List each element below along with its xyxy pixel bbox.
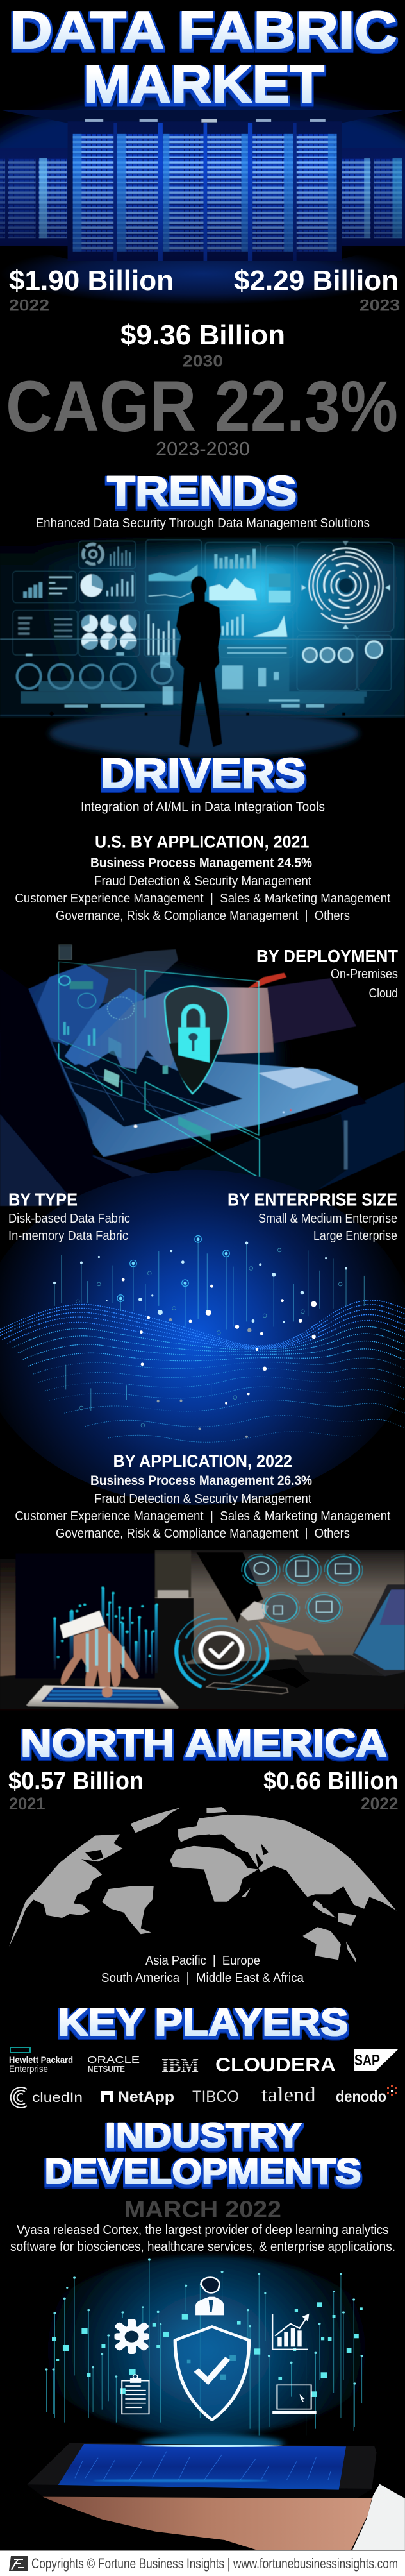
logo: Oracle NetSuite: ORACLE bbox=[87, 2055, 140, 2065]
image: hand holding tablet with holographic security icons bbox=[27, 2256, 405, 2550]
logo: Denodo: denodo bbox=[336, 2088, 386, 2106]
shirt cuff bbox=[352, 2484, 405, 2550]
segment: Fraud Detection & Security Management bbox=[94, 1492, 311, 1506]
date: MARCH 2022 bbox=[124, 2196, 281, 2223]
value: $2.29 Billion bbox=[234, 265, 399, 296]
logo: Hewlett Packard Enterprise: Hewlett Packard bbox=[9, 2055, 73, 2065]
year: 2023 bbox=[360, 296, 400, 314]
hand bbox=[42, 2497, 372, 2550]
line 1: INDUSTRY bbox=[105, 2116, 302, 2155]
block: by application 2022 bbox=[15, 1452, 391, 1541]
businessman silhouette bbox=[176, 576, 222, 748]
heading: drivers: DRIVERS bbox=[101, 749, 306, 797]
segment: In-memory Data Fabric bbox=[8, 1229, 128, 1243]
logo: TIBCO: TIBCO bbox=[192, 2088, 239, 2106]
logo: SAP bbox=[354, 2049, 398, 2071]
logo: Hewlett Packard Enterprise bbox=[9, 2047, 73, 2074]
line 2: DEVELOPMENTS bbox=[45, 2151, 361, 2191]
segments: Customer Experience Management | Sales & Marketing Management bbox=[15, 1509, 391, 1523]
stat: 2023 market size bbox=[234, 265, 400, 314]
value: $0.57 Billion bbox=[8, 1768, 144, 1795]
title line 1: DATA FABRIC bbox=[10, 0, 397, 60]
footer background bbox=[0, 2551, 405, 2576]
image: server racks bbox=[0, 94, 405, 305]
logo: Cloudera: CLOUDERA bbox=[215, 2055, 336, 2076]
year: 2021 bbox=[9, 1794, 45, 1813]
heading: trends: TRENDS bbox=[107, 467, 297, 514]
stat: North America 2022 bbox=[263, 1768, 399, 1813]
footer bbox=[0, 2550, 405, 2576]
segment: On-Premises bbox=[331, 967, 398, 981]
drivers text: Integration of AI/ML in Data Integration Tools bbox=[81, 801, 325, 815]
year: 2022 bbox=[9, 296, 49, 314]
logo: Oracle NetSuite: NETSUITE bbox=[88, 2064, 125, 2074]
icon: shield with check bbox=[175, 2326, 249, 2420]
heading: U.S. BY APPLICATION, 2021 bbox=[95, 833, 309, 852]
logo: Hewlett Packard Enterprise: Enterprise bbox=[9, 2063, 48, 2074]
segments: Customer Experience Management | Sales & Marketing Management bbox=[15, 892, 391, 906]
leading segment: Business Process Management 26.3% bbox=[90, 1473, 312, 1488]
icon: growth chart bbox=[272, 2314, 309, 2350]
image: business hands with tablet and check mark bbox=[0, 1539, 405, 1725]
logo: SAP: SAP bbox=[354, 2052, 380, 2069]
value: $0.66 Billion bbox=[263, 1768, 399, 1795]
logo: Oracle NetSuite bbox=[87, 2055, 140, 2074]
trends text: Enhanced Data Security Through Data Management Solutions bbox=[36, 516, 370, 530]
stat: 2030 market size bbox=[120, 319, 285, 371]
title bbox=[10, 0, 397, 114]
CAGR period: 2023-2030 bbox=[156, 437, 250, 460]
regions line 2: South America | Middle East & Africa bbox=[101, 1971, 304, 1985]
leading segment: Business Process Management 24.5% bbox=[90, 856, 312, 870]
image: data wave with glowing particles bbox=[0, 1170, 405, 1505]
icon: laptop bbox=[272, 2385, 317, 2414]
map: world globe bbox=[9, 1807, 397, 1962]
image: businessman viewing data dashboard bbox=[0, 534, 405, 757]
value: $1.90 Billion bbox=[9, 265, 174, 296]
logo: NetApp: NetApp bbox=[118, 2089, 174, 2106]
block: U.S. by application 2021 bbox=[15, 833, 391, 923]
block: by deployment bbox=[256, 946, 398, 1001]
stat: North America 2021 bbox=[8, 1768, 144, 1813]
heading: industry developments bbox=[45, 2116, 361, 2191]
region list bbox=[101, 1954, 304, 1985]
icon: person bbox=[195, 2277, 224, 2315]
year: 2022 bbox=[361, 1794, 399, 1813]
logos: key players bbox=[9, 2047, 398, 2108]
logo: Fortune Business Insights bbox=[9, 2556, 28, 2571]
segments: Governance, Risk & Compliance Management | Others bbox=[56, 1527, 350, 1541]
block: by enterprise size bbox=[227, 1189, 397, 1243]
logo: Talend: talend bbox=[261, 2083, 315, 2106]
development text bbox=[10, 2223, 395, 2254]
line 1: Vyasa released Cortex, the largest provider of deep learning analytics bbox=[17, 2223, 388, 2237]
heading: BY TYPE bbox=[8, 1189, 78, 1210]
heading: key players: KEY PLAYERS bbox=[58, 2001, 349, 2044]
tablet bbox=[27, 2443, 377, 2498]
segment: Cloud bbox=[369, 987, 398, 1001]
segment: Disk-based Data Fabric bbox=[8, 1212, 130, 1226]
image: hands typing on laptop with security shield bbox=[0, 936, 405, 1206]
regions line 1: Asia Pacific | Europe bbox=[145, 1954, 260, 1968]
segment: Fraud Detection & Security Management bbox=[94, 874, 311, 888]
icon: gear bbox=[113, 2319, 150, 2354]
logo: CluedIn: cluedIn bbox=[32, 2090, 83, 2105]
line 2: software for biosciences, healthcare services, & enterprise applications. bbox=[10, 2240, 395, 2254]
block: by type bbox=[8, 1189, 130, 1243]
logo: IBM: IBM bbox=[161, 2054, 199, 2076]
segments: Governance, Risk & Compliance Management | Others bbox=[56, 909, 350, 923]
stat: 2022 market size bbox=[9, 265, 174, 314]
heading: BY APPLICATION, 2022 bbox=[113, 1452, 292, 1471]
footer divider bbox=[0, 2550, 405, 2551]
title line 2: MARKET bbox=[83, 54, 324, 114]
year: 2030 bbox=[183, 353, 223, 371]
heading: north america: NORTH AMERICA bbox=[21, 1722, 387, 1765]
icon: clipboard bbox=[122, 2375, 149, 2414]
stat: CAGR bbox=[6, 366, 398, 460]
logo: CluedIn bbox=[11, 2087, 83, 2108]
value: $9.36 Billion bbox=[120, 319, 285, 351]
